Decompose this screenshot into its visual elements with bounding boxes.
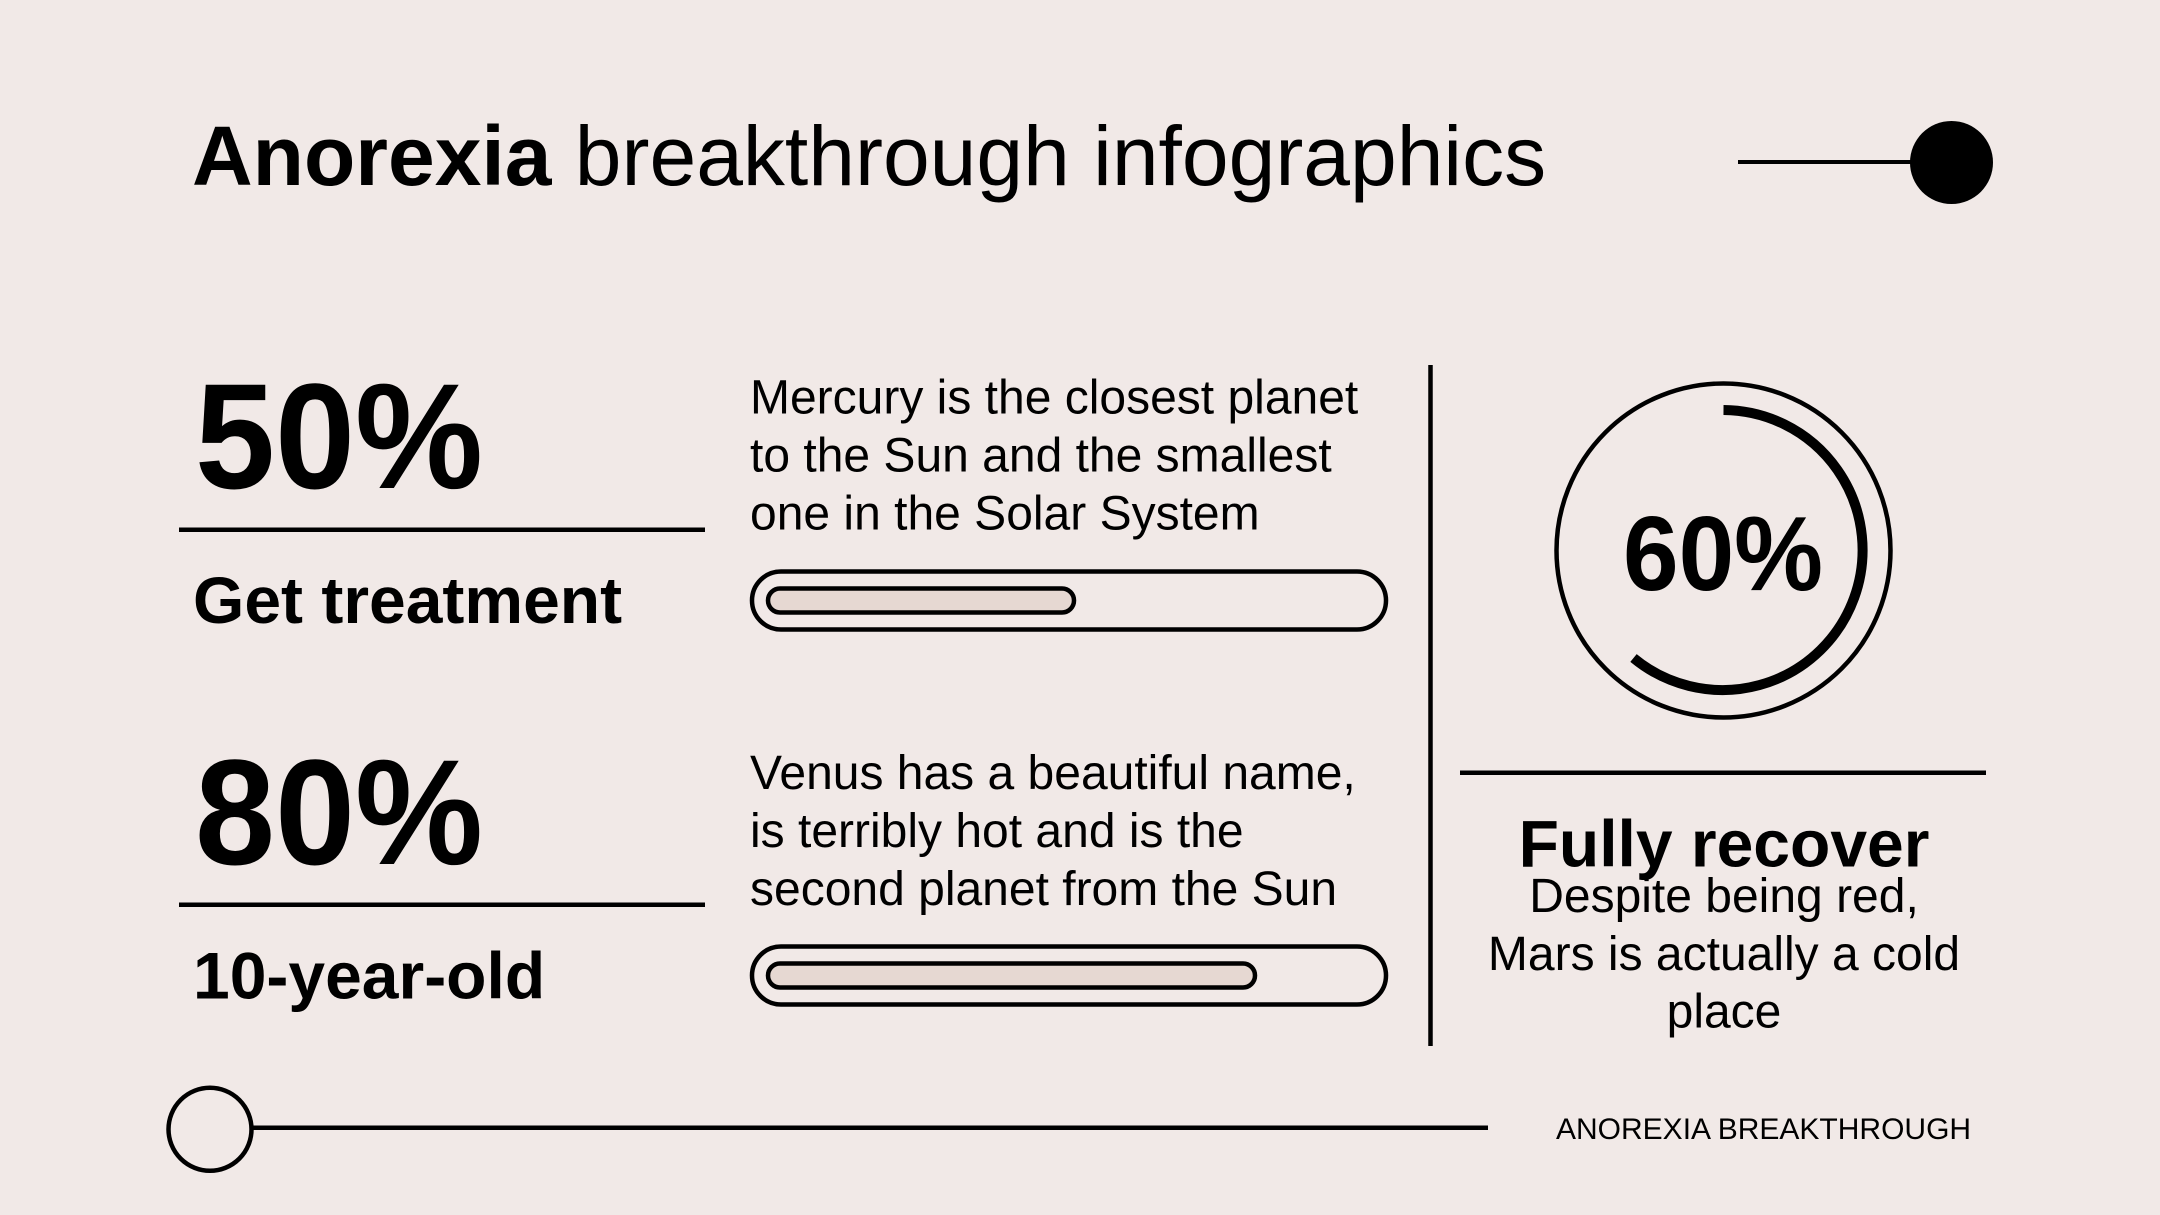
text: mars description: place	[1667, 986, 1781, 1038]
text: mars description: Mars is actually a cold	[1488, 928, 1960, 981]
panel: get treatment statistic	[179, 352, 1386, 637]
text: mercury description: Mercury is the closest planet	[750, 372, 1358, 424]
footer text: ANOREXIA BREAKTHROUGH	[1556, 1113, 1971, 1146]
text: venus description: second planet from the Sun	[750, 863, 1337, 916]
icon: top line with filled dot	[1738, 121, 1993, 204]
text: mars description: Despite being red,	[1529, 870, 1919, 923]
label: fully recover: Fully recover	[1519, 806, 1929, 880]
panel: 10-year-old statistic	[179, 728, 1386, 1012]
progress bar: mercury	[752, 572, 1386, 630]
text: venus description: is terribly hot and is the	[750, 805, 1244, 858]
footer: line with outlined circle	[168, 1088, 1488, 1171]
chart: 60% donut	[1556, 384, 1890, 718]
label: 10-year-old: 10-year-old	[193, 938, 545, 1012]
stat: 50%: 50%	[195, 352, 483, 520]
text: venus description: Venus has a beautiful name,	[750, 747, 1356, 800]
label: get treatment: Get treatment	[193, 563, 622, 637]
stat: 80%: 80%	[195, 728, 483, 896]
title: Anorexia breakthrough infographics	[192, 109, 1546, 203]
text: mercury description: one in the Solar System	[750, 488, 1260, 540]
chart: 60% donut: 60%	[1623, 495, 1823, 613]
text: mercury description: to the Sun and the smallest	[750, 430, 1332, 482]
progress bar: venus	[752, 946, 1386, 1004]
panel: fully recover	[1460, 384, 1986, 1038]
